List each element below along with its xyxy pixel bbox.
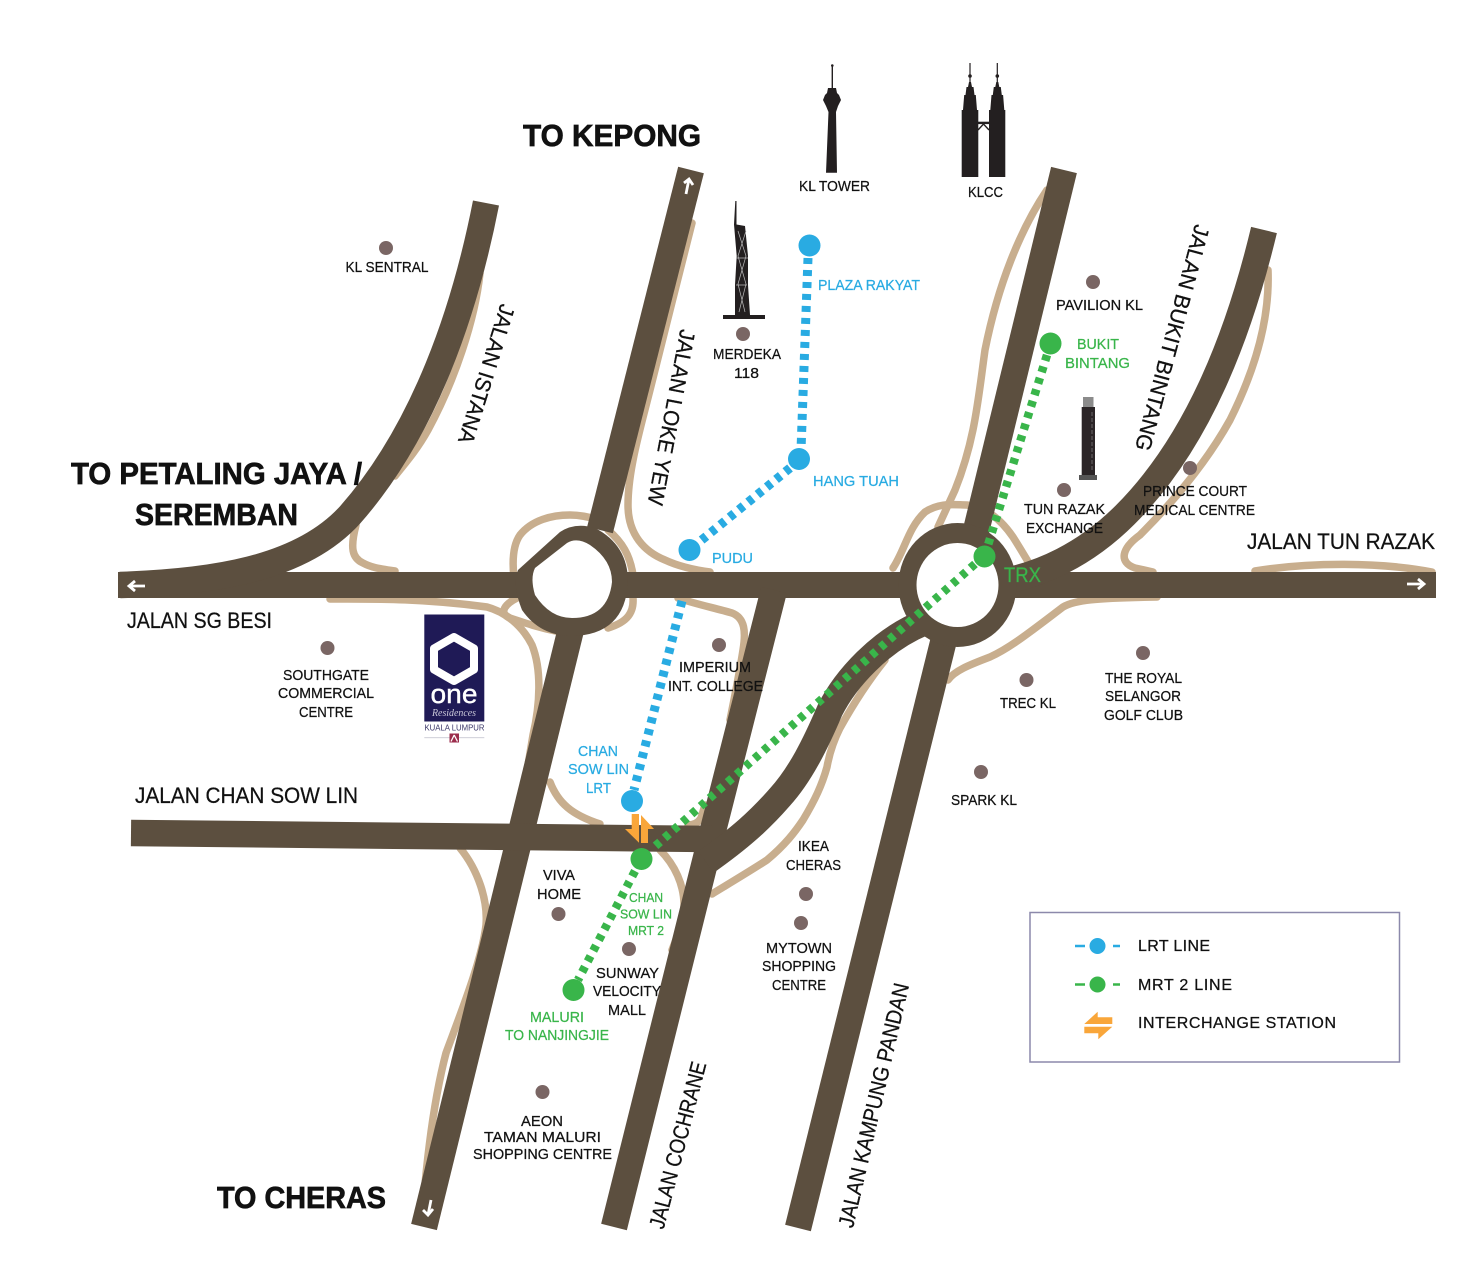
poi: TREC KL bbox=[1000, 673, 1056, 712]
road label: Jalan Loke Yew: JALAN LOKE YEW bbox=[643, 328, 700, 507]
station label: Chan Sow Lin MRT 2: SOW LIN bbox=[620, 906, 672, 922]
poi: The Royal Selangor Golf Club: GOLF CLUB bbox=[1104, 707, 1183, 724]
legend item: MRT 2 line: MRT 2 LINE bbox=[1138, 977, 1232, 994]
poi: Imperium Int. College bbox=[668, 638, 763, 695]
legend item: interchange station bbox=[1084, 1012, 1336, 1039]
station label: Chan Sow Lin MRT 2 bbox=[620, 890, 672, 938]
poi: Pavilion KL: PAVILION KL bbox=[1056, 297, 1143, 314]
station label: Maluri to Nanjingjie: MALURI bbox=[530, 1009, 584, 1026]
poi: AEON Taman Maluri Shopping Centre: AEON bbox=[521, 1113, 563, 1130]
poi: KL Sentral bbox=[346, 241, 428, 276]
station label: Maluri to Nanjingjie: TO NANJINGJIE bbox=[505, 1027, 609, 1044]
poi: TREC KL: TREC KL bbox=[1000, 695, 1056, 712]
road: Jalan Loke Yew south bbox=[424, 625, 572, 1227]
station label: Plaza Rakyat: PLAZA RAKYAT bbox=[818, 277, 920, 294]
road: Jalan Kampung Pandan bbox=[798, 635, 945, 1228]
road label: Jalan Istana: JALAN ISTANA bbox=[453, 301, 520, 447]
station label: Chan Sow Lin LRT bbox=[568, 743, 629, 797]
road network bbox=[118, 170, 1436, 1228]
road: diagonal connector bbox=[706, 622, 925, 862]
poi: Imperium Int. College: INT. COLLEGE bbox=[668, 678, 763, 695]
road: Jalan Loke Yew north bbox=[600, 170, 691, 530]
poi: AEON Taman Maluri Shopping Centre: SHOPPING CENTRE bbox=[473, 1146, 612, 1163]
poi: Viva Home bbox=[537, 867, 581, 921]
poi: IKEA Cheras bbox=[786, 838, 841, 901]
station label: Chan Sow Lin MRT 2: CHAN bbox=[629, 890, 663, 905]
poi: Spark KL bbox=[951, 765, 1017, 809]
poi: Tun Razak Exchange bbox=[1024, 483, 1105, 537]
logo: One Residences bbox=[424, 614, 485, 742]
station label: Bukit Bintang: BINTANG bbox=[1065, 355, 1130, 372]
station label: Chan Sow Lin MRT 2: MRT 2 bbox=[628, 923, 664, 938]
road label: Jalan Chan Sow Lin: JALAN CHAN SOW LIN bbox=[135, 783, 358, 808]
station label: Bukit Bintang: BUKIT bbox=[1077, 336, 1119, 353]
poi: AEON Taman Maluri Shopping Centre bbox=[473, 1085, 612, 1163]
station label: Hang Tuah: HANG TUAH bbox=[813, 473, 899, 490]
poi: MyTown Shopping Centre bbox=[762, 916, 836, 994]
poi: Merdeka 118: 118 bbox=[734, 365, 759, 382]
poi: Tun Razak Exchange: EXCHANGE bbox=[1026, 520, 1103, 537]
station label: Bukit Bintang bbox=[1065, 336, 1130, 372]
road label: Jalan Kampung Pandan: JALAN KAMPUNG PANDAN bbox=[833, 981, 914, 1230]
road label: Jalan Tun Razak: JALAN TUN RAZAK bbox=[1247, 529, 1435, 554]
poi: Imperium Int. College: IMPERIUM bbox=[679, 659, 751, 676]
station label: Maluri to Nanjingjie bbox=[505, 1009, 609, 1044]
heading: To Petaling Jaya / Seremban: SEREMBAN bbox=[135, 497, 298, 532]
icon: interchange arrows bbox=[625, 814, 654, 843]
poi: Viva Home: HOME bbox=[537, 886, 581, 903]
poi: Sunway Velocity Mall bbox=[593, 942, 661, 1019]
station label: Chan Sow Lin LRT: CHAN bbox=[578, 743, 618, 760]
poi: MyTown Shopping Centre: MYTOWN bbox=[766, 940, 832, 957]
poi: Southgate Commercial Centre: CENTRE bbox=[299, 704, 353, 721]
LRT stations bbox=[621, 234, 820, 812]
road: Jalan Tun Razak / Jalan Sg Besi bbox=[118, 572, 1436, 598]
poi: Pavilion KL bbox=[1056, 275, 1143, 314]
heading: To Cheras: TO CHERAS bbox=[217, 1180, 386, 1215]
poi: AEON Taman Maluri Shopping Centre: TAMAN MALURI bbox=[484, 1129, 601, 1146]
logo: One Residences: one bbox=[430, 679, 478, 709]
poi: MyTown Shopping Centre: CENTRE bbox=[772, 977, 826, 994]
poi: Viva Home: VIVA bbox=[543, 867, 575, 884]
poi: Sunway Velocity Mall: MALL bbox=[608, 1002, 646, 1019]
road: Jalan Bukit Bintang bbox=[1000, 230, 1264, 582]
road arrows bbox=[129, 179, 1424, 1215]
poi: MyTown Shopping Centre: SHOPPING bbox=[762, 958, 836, 975]
poi: KL Sentral: KL SENTRAL bbox=[346, 259, 428, 276]
poi: Southgate Commercial Centre: SOUTHGATE bbox=[283, 667, 369, 684]
poi: Sunway Velocity Mall: VELOCITY bbox=[593, 983, 661, 1000]
panel: legend bbox=[1030, 912, 1400, 1062]
poi: Spark KL: SPARK KL bbox=[951, 792, 1017, 809]
heading: To Kepong: TO KEPONG bbox=[523, 118, 701, 153]
legend item: LRT line bbox=[1075, 938, 1210, 955]
poi: Sunway Velocity Mall: SUNWAY bbox=[596, 965, 659, 982]
poi: The Royal Selangor Golf Club: THE ROYAL bbox=[1105, 670, 1182, 687]
poi: The Royal Selangor Golf Club: SELANGOR bbox=[1105, 688, 1181, 705]
roundabout: west bbox=[516, 526, 628, 636]
landmark: KL Tower bbox=[823, 64, 841, 173]
landmark: Exchange 106 bbox=[1079, 397, 1097, 480]
station label: Pudu: PUDU bbox=[712, 550, 753, 567]
poi: Merdeka 118 bbox=[713, 327, 781, 382]
legend item: interchange station: INTERCHANGE STATION bbox=[1138, 1015, 1336, 1032]
legend item: LRT line: LRT LINE bbox=[1138, 938, 1210, 955]
road: Jalan Cochrane bbox=[614, 590, 774, 1227]
poi: Tun Razak Exchange: TUN RAZAK bbox=[1024, 501, 1105, 518]
poi: Southgate Commercial Centre bbox=[278, 641, 374, 721]
poi: Prince Court Medical Centre: PRINCE COURT bbox=[1143, 483, 1247, 500]
landmark: Merdeka 118 bbox=[723, 201, 765, 319]
poi: Merdeka 118: MERDEKA bbox=[713, 346, 781, 363]
roundabout: TRX bbox=[898, 523, 1016, 647]
poi: IKEA Cheras: CHERAS bbox=[786, 857, 841, 874]
poi: Southgate Commercial Centre: COMMERCIAL bbox=[278, 685, 374, 702]
station label: TRX: TRX bbox=[1004, 564, 1041, 587]
MRT 2 line bbox=[578, 355, 1047, 980]
road: Jalan Chan Sow Lin bbox=[131, 833, 712, 839]
poi: Prince Court Medical Centre: MEDICAL CENTRE bbox=[1134, 502, 1255, 519]
poi: The Royal Selangor Golf Club bbox=[1104, 646, 1183, 724]
logo: One Residences: KUALA LUMPUR bbox=[424, 724, 485, 732]
road label: Jalan Bukit Bintang: JALAN BUKIT BINTANG bbox=[1130, 222, 1214, 454]
secondary roads bbox=[330, 190, 1432, 1195]
LRT line bbox=[634, 258, 808, 790]
road: Jalan Istana bbox=[120, 203, 486, 585]
poi: Prince Court Medical Centre bbox=[1134, 461, 1255, 519]
road label: Jalan Cochrane: JALAN COCHRANE bbox=[644, 1059, 711, 1231]
legend item: MRT 2 line bbox=[1075, 976, 1232, 994]
logo: One Residences: Residences bbox=[431, 707, 476, 719]
landmark: KLCC towers bbox=[962, 63, 1005, 177]
road: north-east road bbox=[975, 170, 1064, 535]
label: KL Tower: KL TOWER bbox=[799, 178, 870, 195]
label: KLCC: KLCC bbox=[968, 184, 1003, 201]
road label: Jalan Sg Besi: JALAN SG BESI bbox=[127, 608, 272, 633]
MRT stations bbox=[562, 332, 1062, 1001]
station label: Chan Sow Lin LRT: SOW LIN bbox=[568, 761, 629, 778]
poi: IKEA Cheras: IKEA bbox=[798, 838, 829, 855]
heading: To Petaling Jaya / Seremban bbox=[71, 456, 362, 532]
station label: Chan Sow Lin LRT: LRT bbox=[586, 780, 611, 797]
heading: To Petaling Jaya / Seremban: TO PETALING JAYA / bbox=[71, 456, 362, 491]
